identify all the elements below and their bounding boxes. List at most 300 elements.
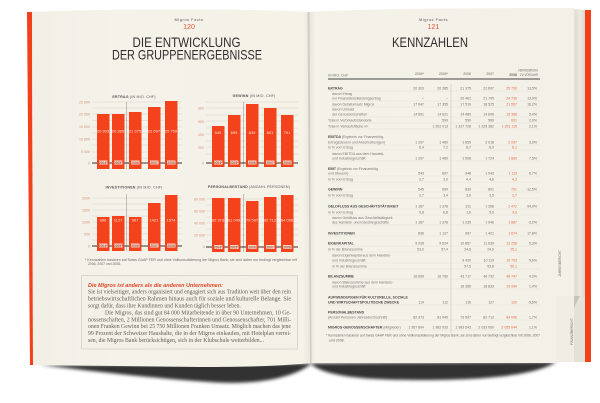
row: Aufwendungen: 120 bbox=[511, 300, 517, 304]
row: Eigenkapital percent bbox=[328, 248, 517, 252]
callout box: Die Migros ist anders: Die Migros, das sind gut 84 000 Mitarbeitende in über 90 Unternehmen, 10 Ge- bbox=[105, 310, 291, 316]
row: Verkaufsfläche: 1 251 115 bbox=[502, 124, 517, 128]
row: EBITDA Handel: 1 508 bbox=[462, 156, 471, 160]
row: Eigenkapital Handel percent: 57,5 bbox=[464, 264, 471, 268]
chart: Ertrag: 2008 bbox=[167, 161, 175, 165]
row: Geldfluss Handel: 1 235 bbox=[462, 220, 471, 224]
row: EBITDA Handel: 1 460 bbox=[439, 156, 448, 160]
row: Investitionen: 997 bbox=[465, 232, 471, 236]
left page title: DER GRUPPENERGEBNISSE bbox=[112, 46, 262, 62]
row: Eigenkapital Handel bbox=[332, 254, 537, 262]
row: Bilanzsumme: 16 839 bbox=[413, 274, 424, 278]
row: Eigenkapital: 5,3% bbox=[529, 242, 537, 246]
chart: Gewinn: 900 bbox=[198, 106, 204, 110]
row: Gewinn percent: 2,7 bbox=[512, 194, 517, 198]
row: Verkaufsfläche: Total m Verkaufsfläche m² bbox=[328, 124, 369, 128]
row: Investitionen: 17,8% bbox=[527, 232, 537, 236]
row: Personalbestand bbox=[328, 310, 537, 320]
row: Verkaufsstandorte: 2,0% bbox=[529, 118, 537, 122]
callout box: Die Migros ist anders: sorgt dafür, dass ihre Kundinnen und Kunden täglich besser leben. bbox=[88, 302, 241, 310]
table header: 2007 bbox=[486, 72, 494, 76]
right footnote: und 2008. bbox=[329, 338, 345, 342]
row: Eigenkapital: 12 258 bbox=[506, 242, 517, 246]
left page header: Migros Facts bbox=[175, 17, 203, 22]
left page header bbox=[175, 17, 203, 31]
row: Bilanzsumme Handel: 18 833 bbox=[483, 284, 494, 288]
row: Verkaufsstandorte: 590 bbox=[442, 118, 448, 122]
row: Ertrag bbox=[328, 86, 537, 90]
chart: Gewinn: GEWINN (IN MIO. CHF) bbox=[233, 94, 275, 98]
row: Gewinn percent: 3,9 bbox=[466, 194, 471, 198]
chart: Gewinn: 2005* bbox=[230, 161, 239, 165]
chart: Ertrag: 2004* bbox=[99, 161, 108, 165]
chart: Investitionen: 1000 bbox=[82, 220, 90, 224]
table: Kennzahlen bbox=[328, 68, 540, 333]
chart: Investitionen: 1421 bbox=[150, 218, 159, 222]
row: EBIT: 1 113 bbox=[508, 172, 517, 176]
row: EBITDA: 1 297 bbox=[415, 140, 424, 144]
row: EBITDA Handel bbox=[332, 152, 537, 160]
left page bbox=[32, 9, 311, 367]
chart: Ertrag: 2005* bbox=[114, 161, 123, 165]
row: Detailumsatz: 16,2% bbox=[527, 102, 537, 106]
row: Geldfluss Handel: davon Geldfluss aus Geschäftstätigkeit bbox=[332, 216, 393, 220]
row: EBITDA Handel: 7,5% bbox=[529, 156, 537, 160]
chart: Personalbestand: 2005* bbox=[230, 245, 239, 249]
right page header bbox=[419, 17, 448, 31]
callout box: Die Migros ist anders: Sie ist vielseitiger, anders organisiert und engagiert sich aus Tradition weit über den rein bbox=[88, 288, 291, 296]
row: Umsatz Genossenschaften bbox=[332, 108, 537, 116]
row: Umsatz Genossenschaften: 14 621 bbox=[437, 112, 448, 116]
row: Investitionen: 1 421 bbox=[485, 232, 494, 236]
row: Eigenkapital: 9 928 bbox=[415, 242, 424, 246]
row: Geldfluss percent: 9,6 bbox=[512, 210, 517, 214]
row: Eigenkapital Handel: 5,6% bbox=[529, 258, 537, 262]
side label: jahresbericht: JAHRESBERICHT bbox=[558, 250, 562, 277]
row: Verkaufsstandorte: Total m Verbrkaufsstandorte bbox=[328, 118, 372, 122]
row: EBITDA Handel: 1 869 bbox=[508, 156, 517, 160]
row: EBITDA: 2 097 bbox=[508, 140, 517, 144]
callout box: Die Migros ist anders: 99 Prozent der Schweizer Haushalte, die in der Migros einkaufen, mit Hotelplan verrei- bbox=[88, 330, 291, 337]
row: Geldfluss: 1 187 bbox=[415, 204, 424, 208]
table header: 2006 bbox=[463, 72, 471, 76]
row: EBITDA Handel: und Industriegeschäft bbox=[332, 156, 365, 160]
row: Gewinn percent: 3,5 bbox=[489, 194, 494, 198]
row: Eigenkapital Handel percent: 56,1 bbox=[510, 264, 517, 268]
right footnote: * Kennzahlen basieren auf Swiss GAAP FER und ohne Vollkonsolidierung der Migros Bank; sie sind daher nur bedingt vergleichbar mit 2006, 2007 bbox=[326, 334, 540, 338]
row: Geldfluss Handel: des Handels- und Industriegeschäfts bbox=[332, 220, 389, 224]
row: Bilanzsumme: 43 717 bbox=[460, 274, 471, 278]
chart: Investitionen: 1500 bbox=[82, 208, 90, 212]
chart: Personalbestand: 0 bbox=[203, 245, 205, 249]
chart: Ertrag: 10 000 bbox=[79, 138, 90, 142]
row: Genossenschafter: 1,1% bbox=[529, 326, 537, 330]
row: Genossenschafter: MIGROS-GENOSSENSCHAFTER (Mitglieder) bbox=[328, 326, 401, 330]
chart: Personalbestand: 60 000 bbox=[194, 210, 205, 214]
row: Personalbestand: (Anzahl Personen Jahresdurchschnitt) bbox=[328, 316, 387, 320]
chart: Ertrag: 20 385 bbox=[112, 128, 125, 134]
row: Personalbestand: 82 712 bbox=[483, 316, 494, 320]
row: Bilanzsumme Handel: und Industriegeschäft bbox=[332, 284, 365, 288]
row: Eigenkapital Handel percent: 53,8 bbox=[487, 264, 494, 268]
chart: Gewinn: 699 bbox=[231, 130, 238, 135]
row: EBITDA bbox=[328, 135, 537, 144]
row: EBITDA Handel: 1 297 bbox=[415, 156, 424, 160]
table header: ZU VORJAHR bbox=[520, 73, 538, 77]
row: Eigenkapital: 9 624 bbox=[439, 242, 448, 246]
table header: VERÄNDERUNG bbox=[518, 68, 538, 72]
row: Ertrag: 13,5% bbox=[527, 86, 537, 90]
left footnote: 2006, 2007 und 2008. bbox=[88, 262, 121, 266]
row: Eigenkapital percent: 25,1 bbox=[510, 248, 517, 252]
row: EBIT percent: 4,6 bbox=[489, 178, 494, 182]
row: Verkaufsfläche: 1 202 013 bbox=[432, 124, 448, 128]
chart: Gewinn: 801 bbox=[267, 130, 274, 135]
callout box: Die Migros ist anders: Die Migros ist anders als die anderen Unternehmen: bbox=[88, 283, 223, 289]
table header: IN MIO. CHF bbox=[328, 74, 348, 78]
chart: Personalbestand: 80 000 bbox=[194, 198, 205, 202]
book gutter bbox=[308, 12, 312, 363]
row: EBITDA percent: in % vom Ertrag bbox=[328, 146, 353, 150]
row: Aufwendungen bbox=[328, 296, 537, 304]
row: Aufwendungen: 116 bbox=[465, 300, 471, 304]
right page header: 121 bbox=[428, 24, 439, 31]
row: Geldfluss: GELDFLUSS AUS GESCHÄFTSTÄTIGKEIT bbox=[328, 204, 399, 208]
row: Verkaufsfläche: 1 227 728 bbox=[455, 124, 471, 128]
row: Geldfluss percent: 6,8 bbox=[443, 210, 448, 214]
right page title: KENNZAHLEN bbox=[392, 34, 468, 50]
chart: Investitionen: 896 bbox=[100, 218, 107, 222]
table header: 2004* bbox=[415, 72, 425, 76]
row: EBIT percent: in % vom Ertrag bbox=[328, 178, 353, 182]
row: Personalbestand: 1,7% bbox=[529, 316, 537, 320]
chart: Ertrag: 0 bbox=[88, 162, 90, 166]
row: Ertrag: 22 697 bbox=[483, 86, 494, 90]
row: Geldfluss: 1 268 bbox=[485, 204, 494, 208]
row: Investitionen: INVESTITIONEN bbox=[328, 232, 355, 236]
row: Gewinn: 801 bbox=[488, 188, 494, 192]
row: Umsatz Genossenschaften: 15 388 bbox=[506, 112, 517, 116]
row: Bilanzsumme Handel: davon Bilanzsumme aus dem Handels- bbox=[332, 280, 394, 284]
row: EBITDA percent: 6,4 bbox=[419, 146, 424, 150]
row: Eigenkapital bbox=[328, 242, 537, 246]
row: Finanzdienstleistungsertrag: – bbox=[446, 96, 448, 100]
chart: Investitionen: 2008 bbox=[167, 244, 175, 248]
row: EBITDA: 2 018 bbox=[485, 140, 494, 144]
row: Genossenschafter: 2 055 044 bbox=[501, 326, 517, 330]
row: Verkaufsstandorte: 589 bbox=[488, 118, 494, 122]
left page header: 120 bbox=[183, 24, 195, 31]
row: Verkaufsstandorte bbox=[328, 118, 537, 122]
callout box: Die Migros ist anders: sen, die Migros Bank berücksichtigen, sich in der Klubschule weiterbilden... bbox=[88, 337, 264, 344]
left page title bbox=[112, 34, 262, 62]
row: Bilanzsumme Handel bbox=[332, 280, 537, 288]
row: Finanzdienstleistungsertrag: 24 730 bbox=[506, 96, 517, 100]
chart: Personalbestand: PERSONALBESTAND (ANZAHL PERSONEN) bbox=[208, 185, 290, 189]
row: EBIT: 543 bbox=[418, 172, 424, 176]
row: Eigenkapital percent: 24,8 bbox=[464, 248, 471, 252]
chart: Personalbestand: 81 049 bbox=[228, 218, 241, 222]
row: Ertrag: 25 750 bbox=[506, 86, 517, 90]
row: Bilanzsumme Handel: 16 385 bbox=[460, 284, 471, 288]
row: Detailumsatz: 17 355 bbox=[437, 102, 448, 106]
row: Investitionen: 896 bbox=[418, 232, 424, 236]
row: Bilanzsumme: 4,3% bbox=[529, 274, 537, 278]
chart: Investitionen: 0 bbox=[88, 244, 90, 248]
row: Eigenkapital Handel: 10 119 bbox=[484, 258, 494, 262]
row: EBITDA: 1 460 bbox=[439, 140, 448, 144]
row: Detailumsatz: 21 557 bbox=[506, 102, 517, 106]
chart: Ertrag: 25 750 bbox=[165, 128, 178, 134]
row: Bilanzsumme bbox=[328, 274, 537, 278]
row: Gewinn: 839 bbox=[465, 188, 471, 192]
row: Finanzdienstleistungsertrag: vor Finanzdienstleistungsertrag bbox=[332, 96, 381, 100]
row: Geldfluss percent: 5,6 bbox=[489, 210, 494, 214]
row: EBIT: 607 bbox=[442, 172, 448, 176]
row: EBITDA: Ertragssteuern und Abschreibungen) bbox=[328, 140, 385, 144]
row: Gewinn percent: 2,7 bbox=[419, 194, 424, 198]
row: Ertrag: 20 385 bbox=[437, 86, 448, 90]
row: Finanzdienstleistungsertrag: 13,9% bbox=[527, 96, 537, 100]
row: Detailumsatz: davon Detailumsatz Migros bbox=[332, 102, 374, 106]
row: Genossenschafter bbox=[328, 326, 537, 330]
right page bbox=[308, 8, 574, 363]
right footnote bbox=[326, 334, 540, 342]
chart: Investitionen: 997 bbox=[132, 218, 139, 222]
row: EBIT: 1 043 bbox=[485, 172, 494, 176]
chart: Gewinn: 839 bbox=[249, 130, 256, 135]
row: Gewinn: 701 bbox=[511, 188, 517, 192]
chart: Investitionen: 2007 bbox=[150, 244, 158, 248]
row: Investitionen bbox=[328, 232, 537, 236]
row: Personalbestand: PERSONALBESTAND bbox=[328, 310, 365, 314]
row: Aufwendungen: -5,5% bbox=[528, 300, 537, 304]
row: Eigenkapital Handel percent: in % der Bilanzsumme bbox=[332, 264, 367, 268]
left page red edge bbox=[27, 12, 33, 365]
row: Geldfluss Handel bbox=[332, 216, 537, 224]
row: Genossenschafter: 1 982 033 bbox=[432, 326, 448, 330]
row: EBITDA percent: 8,9 bbox=[489, 146, 494, 150]
row: Bilanzsumme: BILANZSUMME bbox=[328, 274, 355, 278]
row: Eigenkapital Handel percent bbox=[332, 264, 517, 268]
row: EBIT: EBIT (Ergebnis vor Finanzerfolg bbox=[328, 167, 378, 171]
callout box: Die Migros ist anders: onen Franken Gewinn bei 25 750 Millionen Franken Umsatz. Möglich machen das jene bbox=[88, 323, 291, 330]
table header: 2008 bbox=[509, 73, 517, 77]
row: Geldfluss percent: 5,8 bbox=[419, 210, 424, 214]
row: Bilanzsumme: 46 732 bbox=[483, 274, 494, 278]
left page title: DIE ENTWICKLUNG bbox=[132, 34, 240, 50]
chart: Gewinn: 2008 bbox=[283, 161, 291, 165]
row: Personalbestand: 82 373 bbox=[413, 316, 424, 320]
row: Geldfluss: 94,9% bbox=[527, 204, 537, 208]
chart: Personalbestand: 79 597 bbox=[246, 218, 259, 222]
row: Eigenkapital: 11 639 bbox=[484, 242, 494, 246]
row: Gewinn: GEWINN bbox=[328, 188, 343, 192]
row: EBIT bbox=[328, 167, 537, 176]
row: Bilanzsumme Handel: 1,4% bbox=[529, 284, 537, 288]
row: EBITDA: EBITDA (Ergebnis vor Finanzerfolg, bbox=[328, 135, 384, 139]
row: Bilanzsumme Handel: 19 094 bbox=[506, 284, 517, 288]
row: Geldfluss percent bbox=[328, 210, 517, 214]
chart: Investitionen: 1674 bbox=[167, 218, 176, 222]
row: Eigenkapital Handel: 10 703 bbox=[506, 258, 517, 262]
chart: Investitionen: INVESTITIONEN (IN MIO. CHF) bbox=[105, 186, 163, 190]
row: Geldfluss percent: in % vom Ertrag bbox=[328, 210, 353, 214]
right page header: Migros Facts bbox=[419, 17, 448, 22]
row: Umsatz Genossenschaften: 14 651 bbox=[413, 112, 424, 116]
chart: Personalbestand: 2006 bbox=[248, 245, 256, 249]
row: Aufwendungen: 114 bbox=[418, 300, 424, 304]
row: Gewinn percent bbox=[328, 194, 517, 198]
row: Investitionen: 1 127 bbox=[439, 232, 448, 236]
callout box: Die Migros ist anders: nossenschaften, 2 Millionen Genossenschafterinnen und Genossenschafter, 701 Milli- bbox=[88, 316, 291, 324]
chart: Investitionen: 1127 bbox=[114, 218, 123, 222]
chart: Ertrag: 22 697 bbox=[148, 128, 161, 134]
row: Ertrag: ERTRAG bbox=[328, 86, 343, 90]
row: Finanzdienstleistungsertrag: davon Ertrag bbox=[332, 92, 352, 96]
row: Eigenkapital: EIGENKAPITAL bbox=[328, 242, 355, 246]
chart: Investitionen: 2005* bbox=[114, 244, 123, 248]
row: EBIT percent: 4,4 bbox=[466, 178, 471, 182]
row: Umsatz Genossenschaften: 14 480 bbox=[460, 112, 471, 116]
chart: Ertrag: 15 000 bbox=[79, 125, 90, 129]
row: Eigenkapital percent: 57,4 bbox=[441, 248, 448, 252]
chart: Gewinn: 400 bbox=[198, 133, 204, 137]
right page side strips bbox=[572, 9, 585, 362]
row: EBITDA: 3,9% bbox=[529, 140, 537, 144]
chart: Ertrag: 2007 bbox=[150, 161, 158, 165]
row: Verkaufsstandorte: 590 bbox=[465, 118, 471, 122]
chart: Ertrag: 20 000 bbox=[79, 112, 90, 116]
chart: Gewinn: 2004* bbox=[214, 161, 223, 165]
chart: Personalbestand: 84 096 bbox=[281, 218, 294, 222]
chart: Personalbestand: 2008 bbox=[283, 245, 291, 249]
row: EBITDA percent: 8,7 bbox=[466, 146, 471, 150]
chart: Investitionen: 2006 bbox=[131, 244, 139, 248]
row: Genossenschafter: 1 957 804 bbox=[408, 326, 424, 330]
row: Bilanzsumme: 16 780 bbox=[437, 274, 448, 278]
row: Eigenkapital Handel: 9 420 bbox=[462, 258, 471, 262]
row: EBIT percent: 3,0 bbox=[443, 178, 448, 182]
chart: Gewinn: 200 bbox=[198, 146, 204, 150]
row: Ertrag: 20 303 bbox=[413, 86, 424, 90]
row: Gewinn: -12,5% bbox=[526, 188, 537, 192]
row: Finanzdienstleistungsertrag bbox=[332, 92, 537, 100]
row: EBIT percent bbox=[328, 178, 517, 182]
row: Aufwendungen: AUFWENDUNGEN FÜR KULTURELLE, SOZIALE bbox=[328, 296, 409, 300]
table header bbox=[328, 68, 540, 79]
row: Detailumsatz: 17 047 bbox=[413, 102, 424, 106]
chart: Personalbestand: 2007 bbox=[266, 245, 274, 249]
row: EBIT percent: 4,3 bbox=[512, 178, 517, 182]
chart: Ertrag: 20 303 bbox=[97, 128, 110, 134]
table header: 2005* bbox=[439, 72, 449, 76]
chart: Gewinn: 0 bbox=[202, 162, 204, 166]
right page red edge bbox=[585, 10, 591, 362]
chart: Ertrag bbox=[79, 95, 182, 169]
chart: Ertrag: 21 375 bbox=[129, 128, 142, 134]
chart: Personalbestand: 82 712 bbox=[264, 218, 277, 222]
row: Geldfluss Handel: 1 887 bbox=[508, 220, 517, 224]
row: Verkaufsfläche bbox=[328, 124, 537, 128]
row: EBITDA Handel: davon EBITDA aus dem Handels- bbox=[332, 152, 385, 156]
chart: Ertrag: 2006 bbox=[131, 161, 139, 165]
row: EBIT: 948 bbox=[465, 172, 471, 176]
row: EBIT: und Steuern) bbox=[328, 172, 348, 176]
row: Finanzdienstleistungsertrag: – bbox=[422, 96, 424, 100]
row: Eigenkapital Handel: davon Eigenkapital aus dem Handels- bbox=[332, 254, 392, 258]
row: Investitionen: 1 674 bbox=[508, 232, 517, 236]
callout box: Die Migros ist anders bbox=[82, 276, 298, 349]
row: Aufwendungen: 112 bbox=[442, 300, 448, 304]
row: Eigenkapital percent: 53,0 bbox=[417, 248, 424, 252]
side tab: finanzbericht bbox=[556, 296, 585, 362]
chart: Investitionen: 500 bbox=[84, 232, 90, 236]
row: Personalbestand: 81 049 bbox=[437, 316, 448, 320]
chart: Personalbestand: 20 000 bbox=[194, 234, 205, 238]
row: Geldfluss: 311 bbox=[465, 204, 471, 208]
row: EBIT: 6,7% bbox=[529, 172, 537, 176]
chart: Gewinn: 2007 bbox=[266, 161, 274, 165]
chart: Investitionen bbox=[82, 186, 182, 251]
row: Gewinn bbox=[328, 188, 537, 192]
row: Umsatz Genossenschaften: 14 608 bbox=[483, 112, 494, 116]
row: EBITDA percent bbox=[328, 146, 517, 150]
row: Genossenschafter: 1 993 543 bbox=[455, 326, 471, 330]
chart: Investitionen: 2000 bbox=[82, 196, 90, 200]
row: Umsatz Genossenschaften: der Genossenschaften bbox=[332, 112, 367, 116]
row: Aufwendungen: 127 bbox=[488, 300, 494, 304]
row: Ertrag: 21 375 bbox=[460, 86, 471, 90]
chart: Ertrag: ERTRAG (IN MIO. CHF) bbox=[112, 95, 156, 99]
book shadow bbox=[40, 362, 556, 383]
chart: Gewinn: 701 bbox=[284, 130, 291, 135]
row: Geldfluss: 2 472 bbox=[508, 204, 517, 208]
row: EBIT percent: 2,7 bbox=[419, 178, 424, 182]
chart: Gewinn: 600 bbox=[198, 120, 204, 124]
row: Geldfluss: 1 378 bbox=[439, 204, 448, 208]
chart: Personalbestand: 2004* bbox=[214, 245, 223, 249]
row: EBITDA Handel: 1 724 bbox=[485, 156, 494, 160]
row: Geldfluss Handel: 1 187 bbox=[415, 220, 424, 224]
chart: Gewinn: 2006 bbox=[248, 161, 256, 165]
row: Geldfluss percent: 1,5 bbox=[466, 210, 471, 214]
row: Umsatz Genossenschaften: davon Umsatz bbox=[332, 108, 355, 112]
left footnote bbox=[85, 258, 297, 266]
row: Genossenschafter: 2 033 060 bbox=[478, 326, 494, 330]
row: Finanzdienstleistungsertrag: 21 705 bbox=[483, 96, 494, 100]
left footnote: * Kennzahlen basieren auf Swiss GAAP FER und ohne Vollkonsolidierung der Migros Bank; sie sind daher nur bedingt vergleichbar mit bbox=[85, 258, 297, 262]
row: Gewinn: 545 bbox=[418, 188, 424, 192]
row: Aufwendungen: UND WIRTSCHAFTSPOLITISCHE ZWECKE bbox=[328, 300, 400, 304]
row: Gewinn: 699 bbox=[442, 188, 448, 192]
row: Umsatz Genossenschaften: 5,4% bbox=[529, 112, 537, 116]
row: Finanzdienstleistungsertrag: 20 462 bbox=[460, 96, 471, 100]
chart: Ertrag: 5 000 bbox=[81, 150, 90, 154]
row: Verkaufsstandorte: 601 bbox=[511, 118, 517, 122]
side tab: finanzbericht: FINANZBERICHT bbox=[570, 318, 574, 345]
row: Geldfluss Handel: -3,0% bbox=[528, 220, 537, 224]
row: EBITDA percent: 7,2 bbox=[443, 146, 448, 150]
row: Geldfluss Handel: 1 946 bbox=[485, 220, 494, 224]
row: EBITDA percent: 8,1 bbox=[512, 146, 517, 150]
row: Verkaufsfläche: 1 225 382 bbox=[478, 124, 494, 128]
chart: Personalbestand: 40 000 bbox=[194, 222, 205, 226]
chart: Gewinn bbox=[198, 94, 298, 167]
row: Gewinn percent: in % vom Ertrag bbox=[328, 194, 353, 198]
chart: Personalbestand: 82 373 bbox=[212, 218, 225, 222]
row: Verkaufsfläche: 2,1% bbox=[529, 124, 537, 128]
